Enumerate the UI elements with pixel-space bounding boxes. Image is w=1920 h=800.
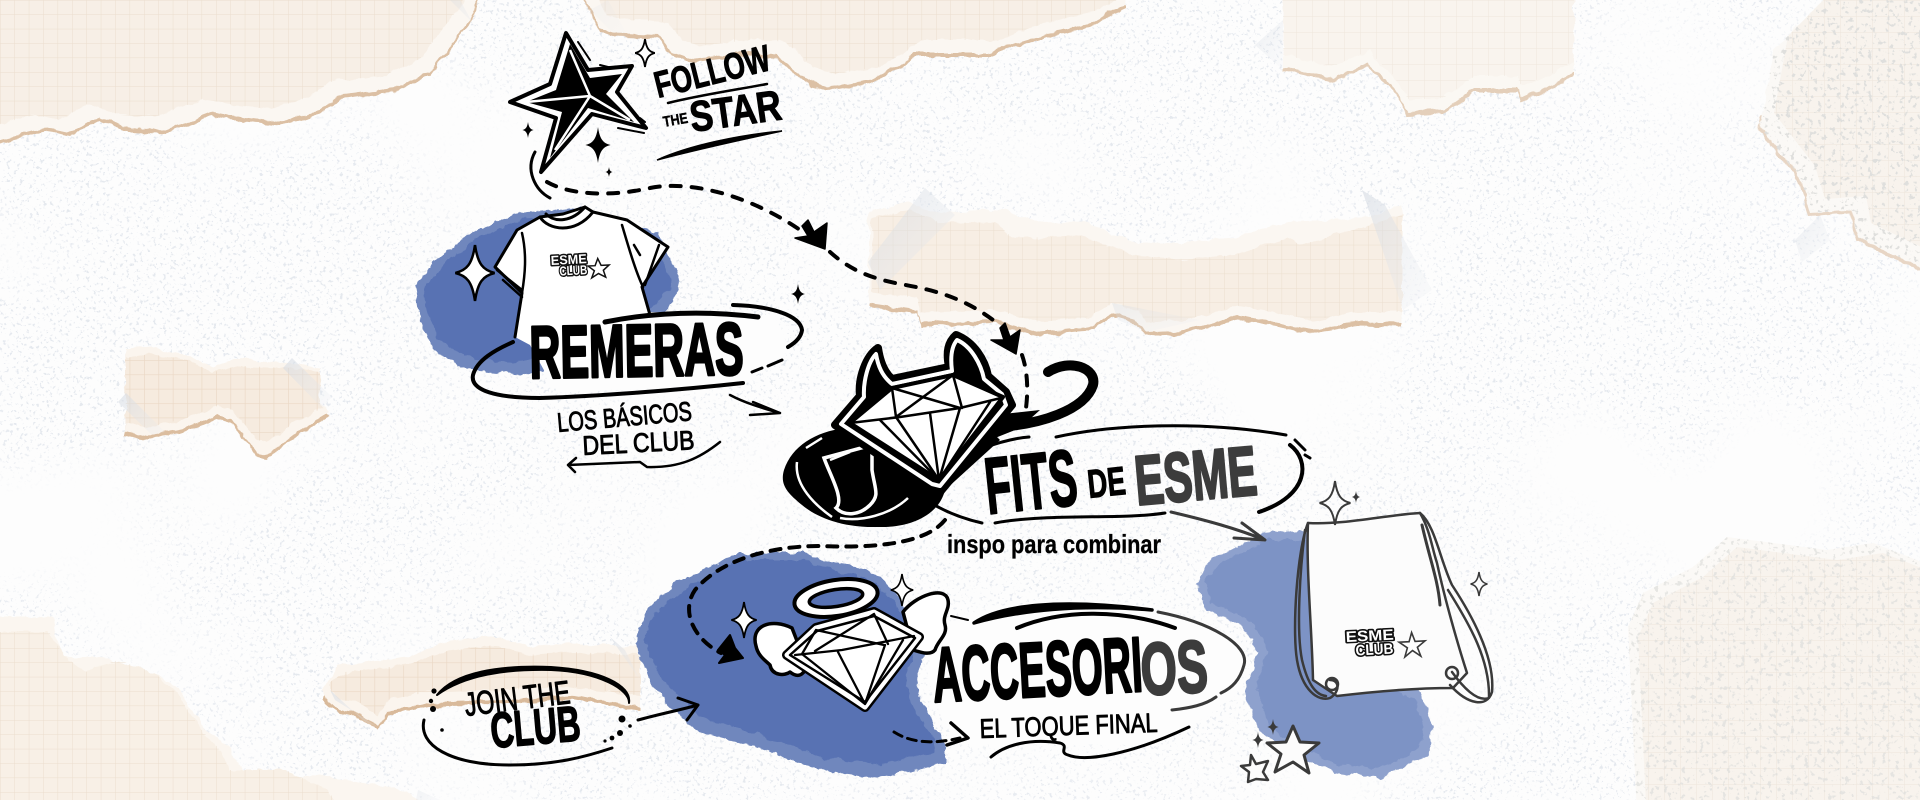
icon: sparkle above wing bbox=[891, 574, 913, 606]
heading: fits de esme bbox=[980, 432, 1260, 531]
bag logo: CLUB bbox=[1355, 641, 1394, 660]
icon: sparkle small left bbox=[522, 122, 534, 138]
arrow: dashed to el toque final bbox=[894, 732, 960, 742]
arrow head: el toque final bbox=[947, 723, 968, 745]
bag logo: ESME bbox=[1345, 627, 1394, 646]
icon: white sparkle left of angel bbox=[731, 602, 757, 638]
label: follow the star: THE bbox=[662, 110, 689, 131]
illustration: t-shirt bbox=[495, 207, 668, 372]
heading: accesorios: OS bbox=[1138, 625, 1210, 711]
torn paper: top left bbox=[0, 0, 500, 146]
torn paper: far right bbox=[1750, 0, 1920, 280]
illustration: angel diamond bbox=[755, 574, 948, 707]
icon: sparkle outline near star bbox=[635, 39, 655, 67]
icon: small sparkle bbox=[791, 284, 805, 304]
heading: accesorios: ACCESORI bbox=[930, 620, 1145, 719]
oval swoosh: accesorios bbox=[951, 604, 1245, 710]
torn paper: centre strip bbox=[860, 200, 1410, 340]
subheading: inspo para combinar: inspo para combinar bbox=[947, 529, 1161, 559]
label: follow the star bbox=[650, 37, 784, 160]
shirt logo: ESME bbox=[550, 251, 587, 268]
torn paper: behind join the club bbox=[320, 630, 645, 731]
label: follow the star: STAR bbox=[687, 82, 784, 142]
halo bbox=[792, 574, 880, 622]
badge: join the club bbox=[423, 667, 632, 765]
icon: sparkle tiny below star bbox=[606, 167, 612, 177]
icon: bag sparkle large bbox=[1320, 481, 1350, 525]
oval swoosh: fits de esme bbox=[922, 426, 1310, 523]
squiggle under el toque final bbox=[991, 727, 1189, 758]
icon: bag sparkle right bbox=[1471, 572, 1487, 596]
paint blob: remeras bbox=[415, 208, 680, 375]
subheading: el toque final: EL TOQUE FINAL bbox=[979, 708, 1158, 744]
white backing under accesorios bbox=[929, 600, 1245, 745]
dashed path: star to diamond bbox=[547, 182, 1027, 408]
torn paper: left note bbox=[120, 340, 335, 460]
heading: accesorios bbox=[930, 620, 1210, 719]
diamond bbox=[850, 375, 1003, 480]
subheading: los basicos del club: LOS BÁSICOS bbox=[556, 396, 693, 438]
dashed path: fits to accesorios bbox=[689, 520, 945, 663]
heading: fits de esme: DE bbox=[1085, 459, 1128, 507]
icon: sparkle large below star bbox=[585, 127, 611, 163]
heading: fits de esme: FITS bbox=[980, 433, 1081, 531]
shirt logo: CLUB bbox=[559, 262, 588, 279]
torn paper: top centre bbox=[584, 0, 1126, 90]
diamond bbox=[787, 612, 919, 707]
torn paper: top right bbox=[1280, 0, 1580, 120]
paint blob: accesorios bbox=[635, 553, 945, 778]
left wing bbox=[755, 624, 806, 675]
tail swoosh of star bbox=[531, 152, 550, 198]
white area under remeras lettering bbox=[540, 312, 790, 392]
icon: main star bbox=[510, 33, 646, 172]
subheading: los basicos del club bbox=[556, 396, 695, 461]
bag logo bbox=[1345, 625, 1426, 660]
right wing bbox=[903, 593, 948, 653]
illustration: drawstring bag bbox=[1295, 513, 1492, 702]
devil tail bbox=[985, 365, 1093, 442]
torn paper: bottom left bbox=[0, 617, 433, 800]
icon: white sparkle on blue blob bbox=[455, 245, 495, 301]
icon: small outlined star bbox=[1241, 755, 1268, 782]
arrow: under del club bbox=[568, 442, 720, 472]
label: follow the star: FOLLOW bbox=[650, 37, 774, 106]
torn paper: bottom right bbox=[1620, 530, 1920, 800]
illustration: devil diamond bbox=[783, 335, 1093, 527]
heading: remeras: REMERAS bbox=[529, 307, 744, 394]
icon: solid sparkle two bbox=[1252, 732, 1264, 748]
icon: solid sparkle one bbox=[1267, 719, 1279, 735]
arrow: fits to bag bbox=[1171, 512, 1265, 540]
icon: large outlined star bbox=[1267, 726, 1319, 773]
arrow: join the club to accesorios bbox=[638, 698, 698, 720]
subheading: los basicos del club: DEL CLUB bbox=[582, 425, 695, 461]
badge: join the club: JOIN THE bbox=[462, 673, 572, 723]
badge: join the club: CLUB bbox=[488, 695, 583, 759]
oval swoosh: remeras bbox=[473, 305, 802, 398]
shirt logo bbox=[550, 250, 610, 280]
arrow: remeras to fits bbox=[730, 395, 780, 415]
heading: fits de esme: ESME bbox=[1132, 432, 1260, 520]
devil body bbox=[783, 425, 1000, 527]
paint blob: bag bbox=[1197, 530, 1433, 778]
devil head bbox=[835, 335, 1012, 492]
icon: bag sparkle tiny bbox=[1352, 491, 1360, 503]
